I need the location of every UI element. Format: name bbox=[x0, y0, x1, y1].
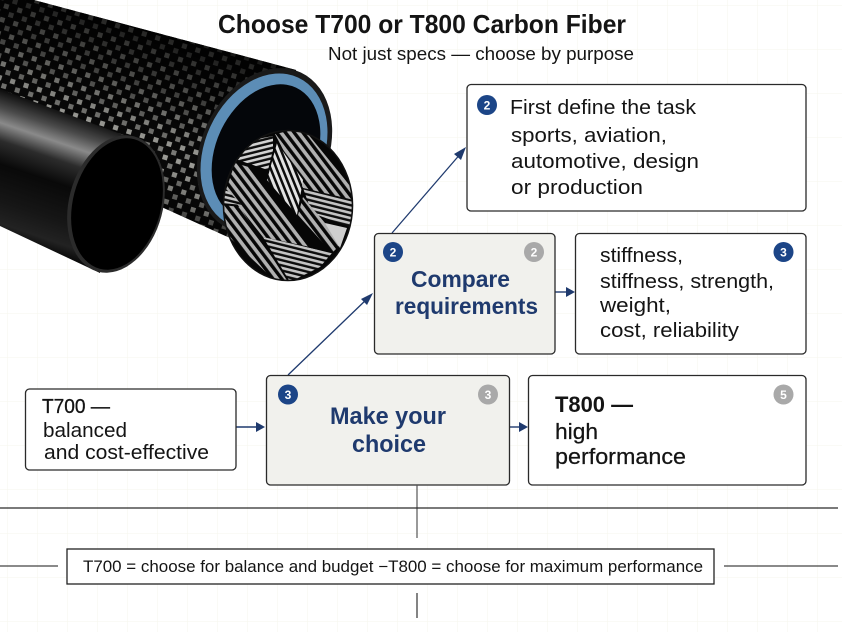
task text: First define the task bbox=[510, 96, 697, 119]
panel: T800 bbox=[528, 376, 806, 485]
arrow: make your choice to T800 bbox=[510, 422, 528, 432]
magnified fiber weave lens bbox=[222, 128, 356, 282]
illustration: carbon fiber tubes bbox=[0, 0, 358, 284]
badge: 5 gray bbox=[774, 384, 794, 404]
T800 text bbox=[555, 392, 686, 469]
badge: 3 blue bbox=[278, 384, 298, 404]
badge: 3 gray: 3 bbox=[485, 388, 492, 402]
properties text: weight, bbox=[599, 294, 671, 317]
subtitle: Not just specs — choose by purpose bbox=[328, 44, 634, 64]
badge: 5 gray: 5 bbox=[780, 388, 787, 402]
task text: or production bbox=[511, 176, 643, 199]
badge: 2: 2 bbox=[484, 98, 491, 112]
T700 text: T700 — bbox=[42, 396, 110, 418]
properties text bbox=[599, 244, 774, 342]
badge: 3 blue: 3 bbox=[285, 388, 292, 402]
callout: summary bbox=[67, 549, 714, 584]
T700 text bbox=[42, 396, 209, 464]
badge: 2 bbox=[477, 95, 497, 115]
arrow: compare requirements to define the task bbox=[392, 147, 466, 233]
properties text: stiffness, strength, bbox=[600, 270, 774, 293]
badge: 2 blue: 2 bbox=[390, 246, 397, 260]
badge: 2 blue bbox=[383, 242, 403, 262]
T700 text: and cost-effective bbox=[44, 442, 209, 464]
badge: 3: 3 bbox=[780, 246, 787, 260]
arrow: compare requirements to properties bbox=[555, 287, 575, 297]
badge: 3 bbox=[774, 242, 794, 262]
choice heading: choice bbox=[352, 431, 426, 458]
large woven carbon fiber tube bbox=[0, 0, 358, 255]
properties text: cost, reliability bbox=[600, 319, 740, 342]
panel: make your choice bbox=[266, 376, 510, 485]
compare heading bbox=[395, 266, 538, 319]
panel: first define the task bbox=[467, 84, 806, 211]
task text: automotive, design bbox=[511, 150, 699, 173]
T800 text: performance bbox=[555, 444, 686, 469]
choice heading: Make your bbox=[330, 403, 446, 430]
task text bbox=[510, 96, 699, 199]
panel: properties bbox=[576, 234, 806, 354]
T700 text: balanced bbox=[43, 420, 127, 442]
badge: 3 gray bbox=[478, 384, 498, 404]
arrow: make your choice to compare requirements bbox=[288, 293, 373, 375]
properties text: stiffness, bbox=[600, 244, 683, 267]
T800 text: high bbox=[555, 419, 598, 444]
T800 text: T800 — bbox=[555, 392, 633, 417]
task text: sports, aviation, bbox=[511, 124, 667, 147]
badge: 2 gray: 2 bbox=[531, 246, 538, 260]
compare heading: requirements bbox=[395, 293, 538, 319]
panel: compare requirements bbox=[374, 234, 555, 354]
badge: 2 gray bbox=[524, 242, 544, 262]
panel: T700 bbox=[26, 389, 236, 470]
choice heading bbox=[330, 403, 446, 458]
callout: summary: T700 = choose for balance and budget −T800 = choose for maximum performance bbox=[83, 558, 703, 576]
title: Choose T700 or T800 Carbon Fiber bbox=[218, 9, 626, 39]
small glossy black tube bbox=[0, 89, 180, 284]
compare heading: Compare bbox=[411, 266, 510, 292]
arrow: T700 to make your choice bbox=[236, 422, 265, 432]
